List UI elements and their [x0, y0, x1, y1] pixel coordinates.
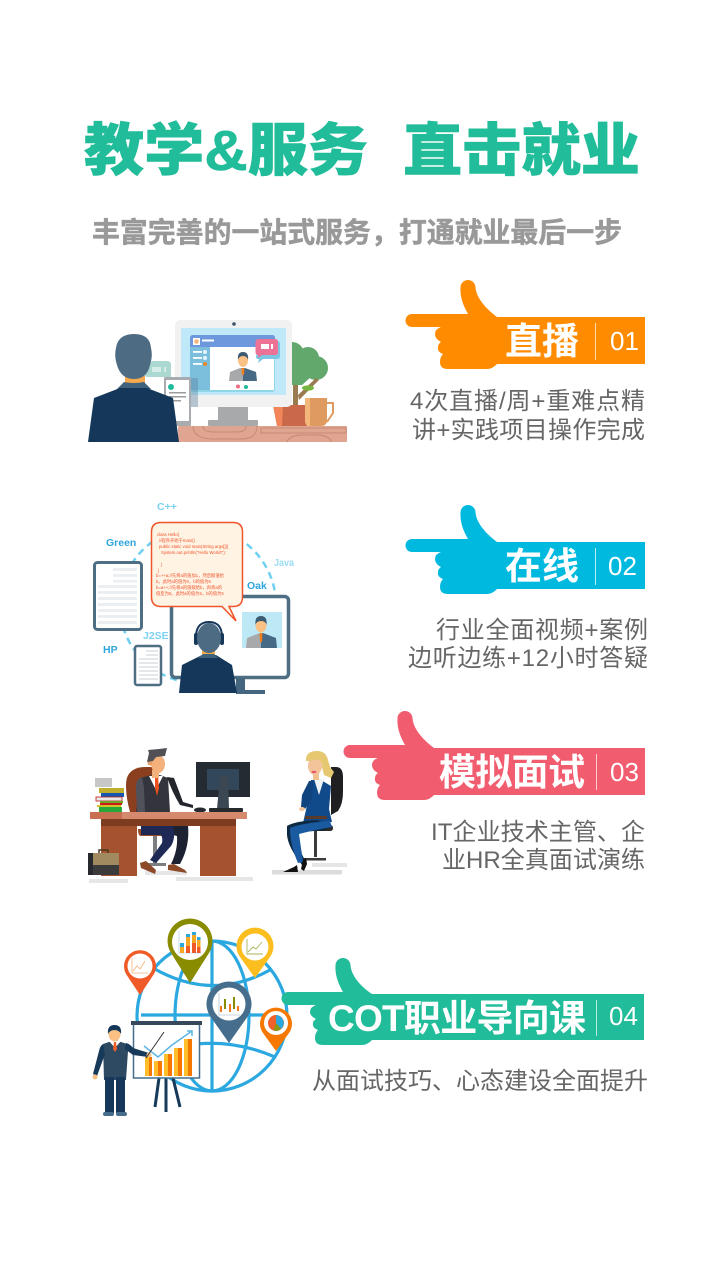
- description: 讲+实践项目操作完成: [412, 417, 645, 444]
- pin: orange: [260, 1008, 292, 1051]
- briefcase: [88, 853, 119, 875]
- pointing hand banner 01: [406, 280, 645, 369]
- man: [126, 767, 158, 812]
- code speech bubble: class Hello{: [157, 532, 180, 537]
- pointing hand banner 04: [282, 958, 644, 1045]
- pin: slate: [206, 981, 252, 1043]
- heading: 模拟面试: [439, 752, 585, 793]
- panel: online: [94, 501, 648, 694]
- illustration: job interview at desk: [88, 748, 347, 883]
- description: [410, 388, 645, 444]
- presenter: [92, 1025, 164, 1116]
- monitor: [196, 762, 250, 797]
- code speech bubble: 值变为6。此时a的值为6，b的值为5: [156, 590, 224, 597]
- number: 01: [610, 326, 639, 356]
- panel: mock interview: [88, 711, 645, 883]
- panel: career course: [92, 918, 648, 1116]
- description: [408, 617, 648, 672]
- woman: [331, 767, 343, 815]
- title: 教学&服务: [84, 119, 368, 183]
- books: [95, 778, 112, 787]
- code speech bubble: b。此时a的值为6，b的值为6: [156, 578, 212, 585]
- technology labels: J2SE: [143, 630, 169, 642]
- number: 04: [609, 1001, 638, 1031]
- description: IT企业技术主管、企: [431, 819, 645, 846]
- heading: COT职业导向课: [328, 998, 586, 1039]
- technology labels: C++: [157, 501, 177, 513]
- illustration: man at video call monitor: [88, 320, 347, 442]
- code speech bubble: b=a++;//先将a的值赋给b，再将a的: [156, 584, 222, 591]
- description: 行业全面视频+案例: [436, 617, 648, 644]
- description: 4次直播/周+重难点精: [410, 388, 645, 415]
- code speech bubble: //程序开始于main(): [159, 537, 196, 544]
- heading: 直播: [505, 321, 579, 362]
- number: 03: [610, 757, 639, 787]
- description: [431, 819, 645, 874]
- pin: olive: [168, 918, 213, 983]
- pin: yellow: [236, 928, 274, 978]
- presentation board: [131, 1021, 202, 1112]
- technology labels: Green: [106, 537, 136, 549]
- code speech bubble: [152, 522, 242, 621]
- code speech bubble: System.out.println("Hello World!");: [161, 550, 226, 555]
- code speech bubble: public static void main(String args[]){: [159, 544, 229, 549]
- title: [84, 119, 640, 183]
- subtitle: 丰富完善的一站式服务，打通就业最后一步: [92, 216, 622, 248]
- pin: red: [124, 950, 156, 995]
- code speech bubble: }: [158, 568, 160, 573]
- heading: 在线: [505, 546, 579, 587]
- technology labels: Oak: [247, 580, 267, 592]
- pointing hand banner 02: [406, 505, 645, 594]
- code speech bubble: b=++a;//先将a的值加1，然后赋值给: [156, 572, 225, 579]
- panel: live streaming: [88, 280, 645, 444]
- number: 02: [608, 551, 637, 581]
- title: 直击就业: [403, 119, 640, 183]
- description: 从面试技巧、心态建设全面提升: [312, 1061, 648, 1096]
- globe: [137, 941, 287, 1091]
- desk: [101, 818, 236, 826]
- illustration: programmer with headset: [94, 501, 294, 694]
- technology labels: HP: [103, 644, 118, 656]
- technology labels: [103, 501, 294, 656]
- description: 边听边练+12小时答疑: [408, 645, 648, 672]
- illustration: globe with map pins and presenter: [92, 918, 292, 1116]
- code speech bubble: }: [161, 562, 163, 567]
- man with headset: [179, 622, 237, 693]
- pointing hand banner 03: [344, 711, 645, 800]
- technology labels: Java: [274, 557, 294, 569]
- description: 业HR全真面试演练: [442, 847, 645, 874]
